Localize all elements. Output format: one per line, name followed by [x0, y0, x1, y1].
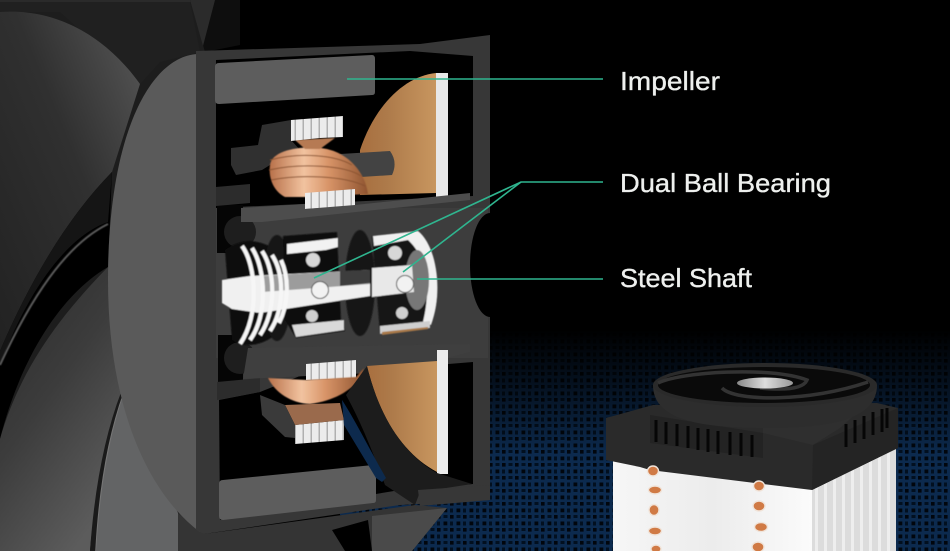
copper heat pipes [648, 466, 768, 551]
fan blades at left [0, 0, 447, 551]
housing bearing left [283, 232, 345, 338]
fan ring [653, 385, 877, 428]
lead lines [314, 79, 603, 279]
white strip upper [436, 73, 448, 200]
impeller magnet block top [215, 55, 375, 104]
black swoosh lower [346, 366, 472, 505]
copper fin upper [360, 73, 436, 195]
shroud cooling slots [656, 408, 887, 457]
lower cavity [219, 362, 473, 520]
CPU cooler product [606, 363, 898, 551]
bearing assembly [222, 230, 438, 345]
spring backing [225, 241, 285, 345]
stator tooth lower [260, 395, 295, 438]
fan hub outer shell [108, 54, 200, 532]
fan hub [737, 378, 793, 388]
spring coils [240, 246, 287, 344]
label: Impeller: Impeller [620, 66, 720, 96]
label: Dual Ball Bearing: Dual Ball Bearing [620, 168, 831, 198]
impeller magnet block bottom [219, 465, 376, 520]
white strip lower [437, 350, 448, 474]
bottom right frame foot [418, 485, 490, 506]
housing bearing right [372, 231, 438, 334]
blue gap lower [342, 400, 386, 482]
bearing housing [216, 208, 488, 358]
middle plate upper [241, 193, 470, 222]
right bearing inner disc [405, 250, 429, 310]
copper fin lower [367, 361, 437, 472]
heatsink fins [613, 448, 896, 551]
copper coil lower [268, 368, 364, 404]
label: Steel Shaft: Steel Shaft [620, 263, 753, 293]
right ball race ring [345, 230, 375, 336]
copper coil upper [269, 138, 368, 197]
shaft stub upper [340, 151, 395, 178]
upper cavity [216, 51, 473, 208]
steel shaft [222, 270, 370, 313]
lamination upper [291, 116, 355, 209]
lamination lower [295, 360, 356, 444]
balls right [388, 246, 402, 260]
black shroud [606, 403, 898, 490]
motor frame cross section [196, 35, 510, 534]
fan blade curves [658, 372, 868, 398]
left ball race ring [262, 235, 292, 341]
balls left [306, 253, 320, 267]
copper windings lower [285, 403, 344, 425]
middle plate lower [243, 344, 470, 379]
stator tooth upper [231, 120, 300, 175]
